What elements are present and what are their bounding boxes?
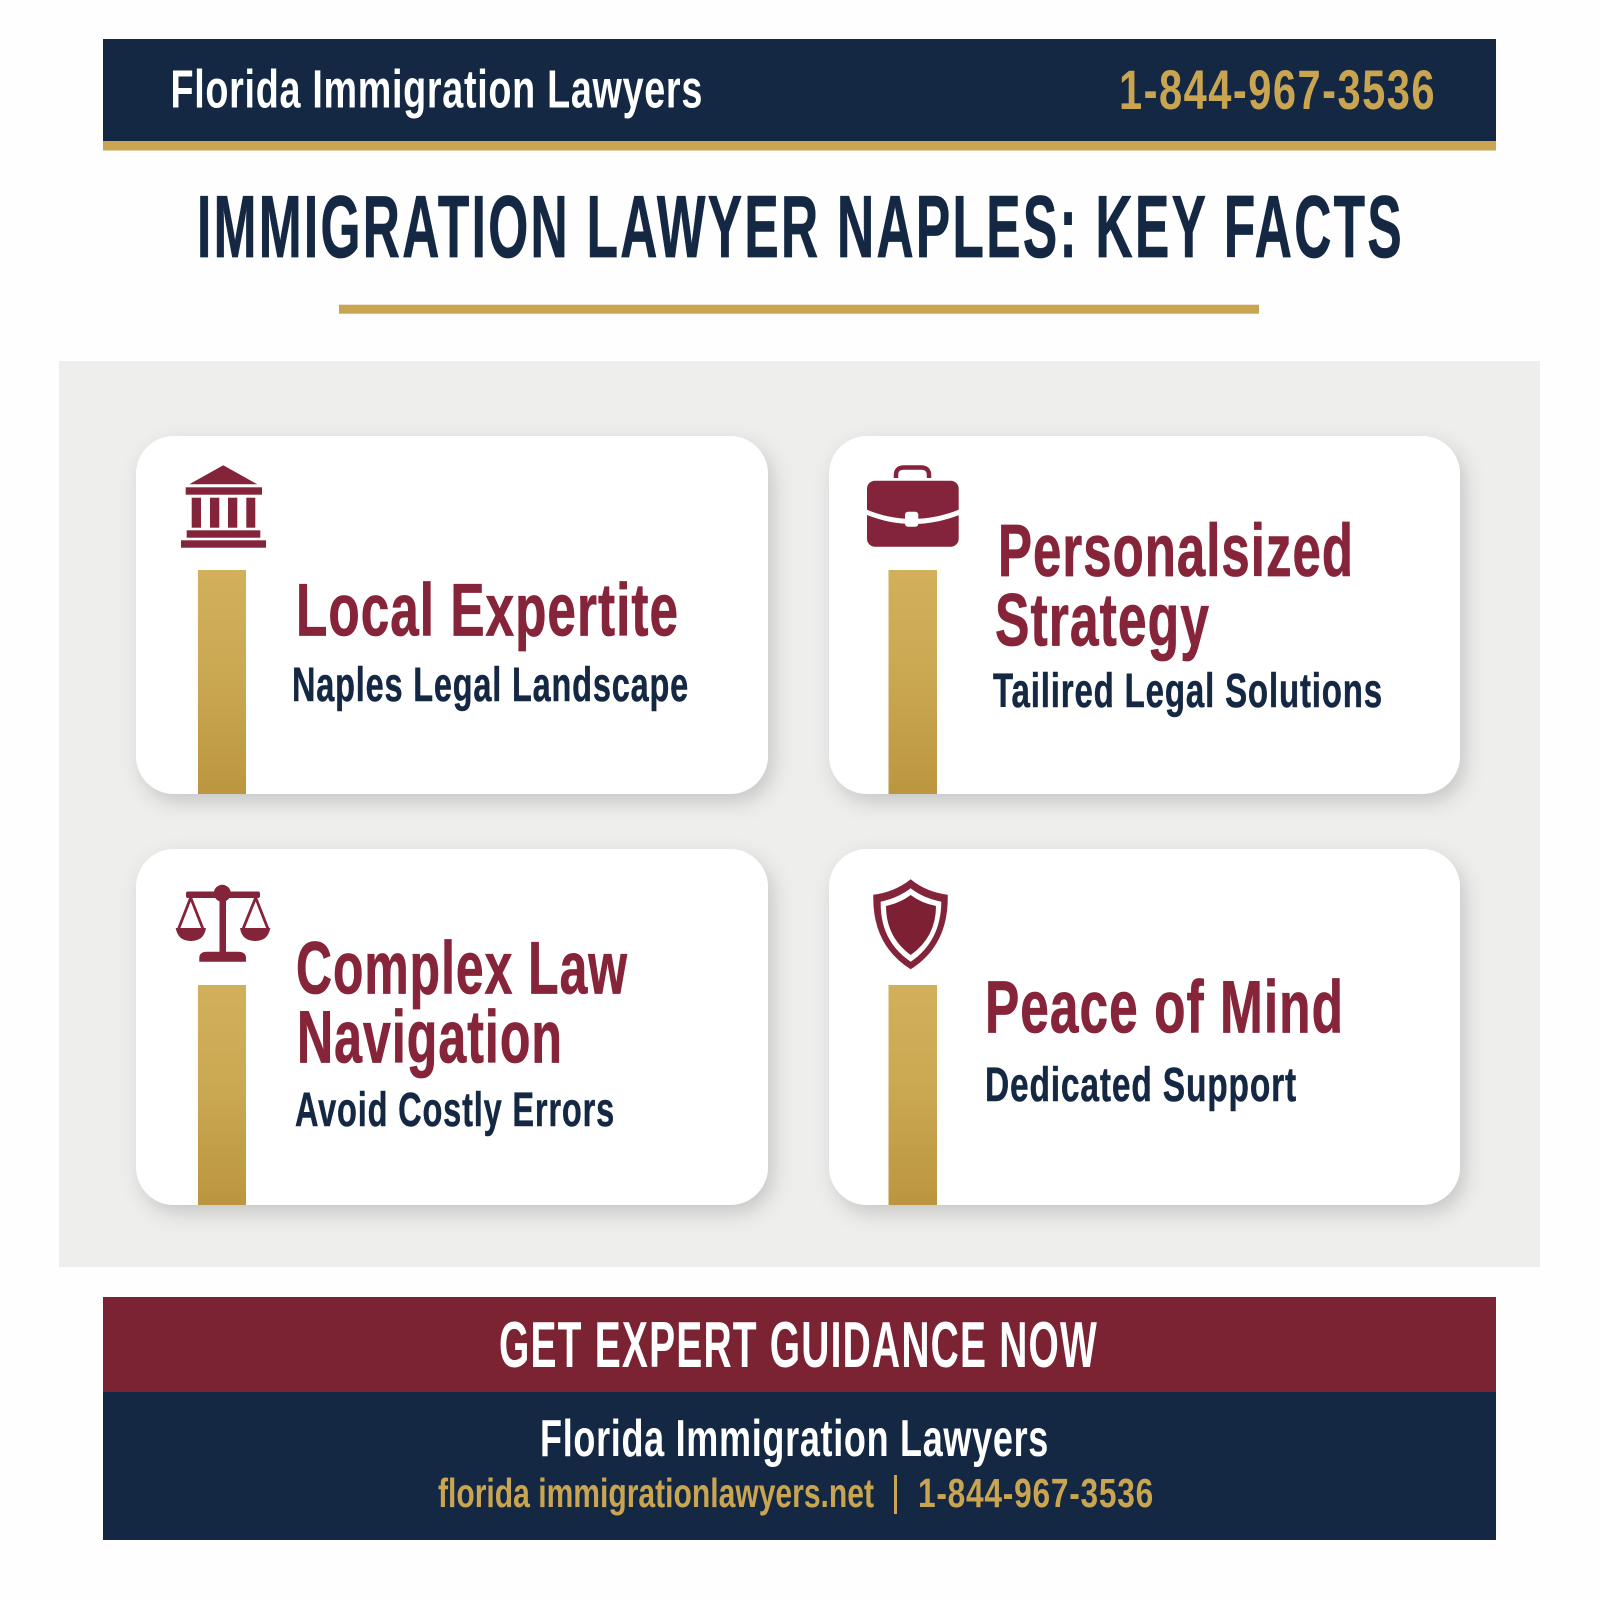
subheading: Avoid Costly Errors [295,1084,615,1137]
heading: Strategy [995,578,1210,662]
icon: courthouse [181,465,266,548]
heading: Navigation [297,996,563,1078]
panel: key facts [59,361,1540,1267]
heading: Local Expertite [296,568,679,652]
heading: Complex Law [296,926,628,1010]
footer firm name: Florida Immigration Lawyers [540,1410,1049,1468]
gold pillar [888,570,937,794]
card: local expertise [136,436,768,794]
card: peace of mind [829,849,1460,1205]
header bar [103,39,1496,150]
subheading: Dedicated Support [985,1059,1297,1112]
website: florida immigrationlawyers.net [438,1470,874,1516]
icon: briefcase [866,468,960,547]
heading [296,926,628,1078]
heading: Personalsized [998,509,1354,592]
firm name: Florida Immigration Lawyers [170,60,703,120]
footer contact block [103,1392,1496,1540]
title underline [339,305,1259,314]
subheading: Naples Legal Landscape [292,659,689,712]
heading: Peace of Mind [985,966,1344,1048]
gold pillar [198,570,246,794]
gold pillar [888,985,937,1205]
heading [995,509,1354,662]
icon: shield [873,879,948,969]
gold pillar [198,985,246,1205]
subheading: Tailired Legal Solutions [993,665,1383,718]
call to action banner [103,1297,1496,1392]
card: personalized strategy [829,436,1460,794]
divider [894,1475,897,1514]
icon: scales of justice [176,885,270,962]
footer phone: 1-844-967-3536 [918,1470,1154,1516]
phone number: 1-844-967-3536 [1119,58,1436,121]
call to action text: GET EXPERT GUIDANCE NOW [499,1308,1098,1381]
card: complex law navigation [136,849,768,1205]
